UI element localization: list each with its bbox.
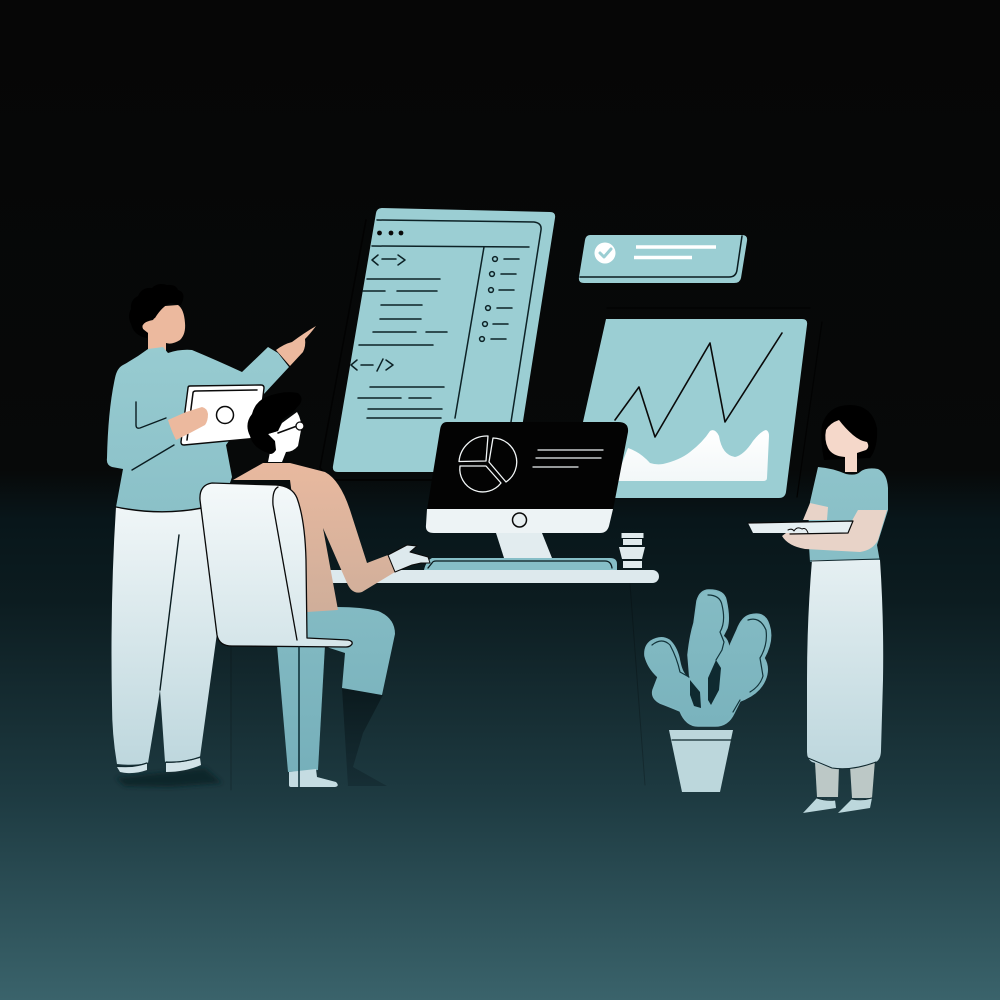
keyboard — [424, 558, 617, 570]
foliage — [645, 590, 771, 726]
woman's near arm — [803, 503, 828, 520]
line chart — [615, 333, 782, 437]
woman's hair — [821, 405, 877, 460]
office chair — [200, 483, 352, 787]
seated man's shoe — [289, 769, 338, 787]
notification text lines — [634, 247, 716, 258]
chair back fold — [273, 487, 297, 640]
waist line — [116, 507, 202, 512]
man's shoes shadow — [116, 768, 222, 787]
monitor screen — [427, 422, 628, 510]
panel: notification card — [579, 235, 747, 283]
figure: standing woman — [748, 405, 888, 813]
pot — [669, 730, 733, 792]
woman's face and neck — [825, 420, 868, 472]
man's sweater — [107, 347, 289, 512]
woman's skirt — [807, 560, 883, 769]
seated man's torso and arm — [233, 463, 395, 612]
pointing hand — [276, 326, 316, 366]
woman's far arm — [782, 510, 887, 552]
panel: code editor window — [320, 208, 555, 480]
woman's shoes — [803, 798, 872, 813]
trouser crease — [160, 535, 179, 690]
woman's legs — [815, 760, 875, 798]
seated man's hand — [388, 545, 430, 572]
desk top — [318, 570, 659, 583]
code lines: left column — [351, 255, 447, 418]
monitor — [426, 422, 628, 558]
plant — [645, 590, 771, 792]
sweater fold lines — [132, 402, 174, 470]
coffee cups — [619, 533, 645, 568]
skirt hem and waist — [808, 559, 880, 769]
icon: check badge — [594, 242, 616, 264]
window control dots — [377, 231, 403, 235]
figure: seated man — [233, 392, 430, 787]
foliage inner outlines — [652, 595, 766, 712]
tablet — [181, 385, 264, 445]
man's head — [129, 284, 185, 352]
chair shell — [200, 483, 352, 647]
woman's shirt — [808, 467, 888, 562]
monitor chin — [426, 509, 613, 533]
trouser cuffs — [117, 757, 201, 773]
figure: standing man — [107, 284, 316, 787]
monitor power button — [512, 513, 526, 527]
seated man's near lower leg — [342, 688, 387, 786]
panel: line and area chart — [566, 308, 822, 498]
screen text lines — [533, 450, 603, 467]
hand on tablet — [168, 407, 208, 440]
pie chart — [459, 436, 517, 492]
man's trousers — [112, 507, 218, 765]
desk legs — [231, 584, 645, 790]
chair post — [298, 647, 300, 787]
monitor stand — [496, 533, 552, 558]
woman's tablet — [748, 521, 853, 534]
seated man's head — [247, 392, 304, 462]
foliage dark wedges — [690, 660, 721, 708]
code lines: right list — [480, 257, 519, 341]
seated man's thigh — [305, 607, 395, 695]
seated man's far leg — [277, 645, 325, 772]
glasses — [278, 422, 304, 433]
area chart — [615, 430, 769, 481]
